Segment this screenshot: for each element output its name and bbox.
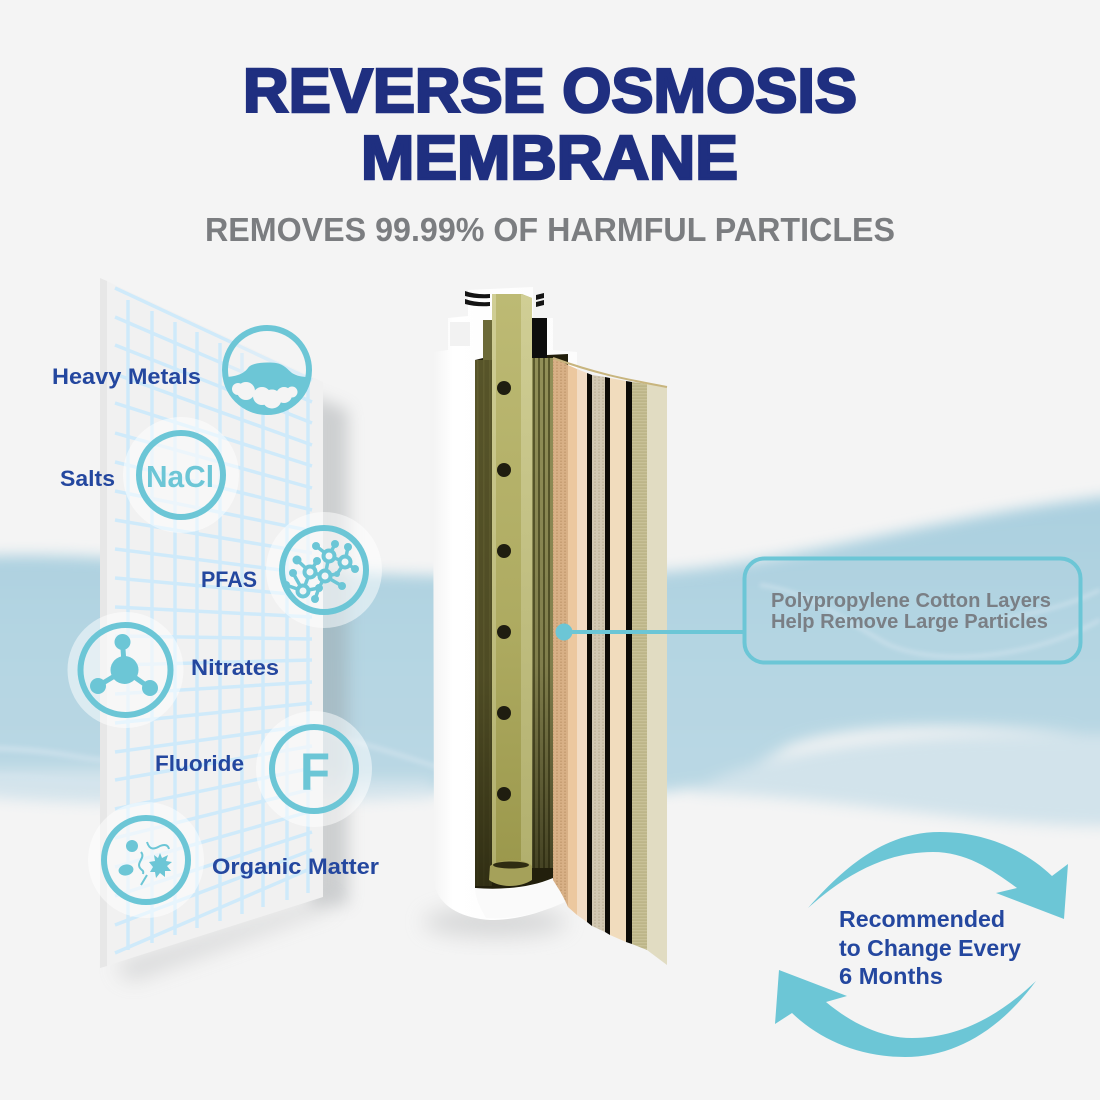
callout: polypropylene cotton layers bbox=[744, 558, 1080, 662]
reminder text: to Change Every bbox=[839, 935, 1021, 961]
item: salts bbox=[60, 417, 239, 533]
title: MEMBRANE bbox=[361, 124, 738, 193]
item: PFAS bbox=[201, 512, 382, 628]
icon: fluoride: F bbox=[300, 743, 330, 802]
arrow: bottom cycle bbox=[775, 970, 1036, 1057]
label: Salts bbox=[60, 466, 115, 491]
item: fluoride bbox=[155, 711, 372, 827]
black collar block bbox=[532, 318, 547, 358]
reminder text bbox=[839, 906, 1021, 989]
cutaway interior bbox=[475, 318, 568, 889]
background water wave band bbox=[0, 494, 1100, 826]
tube base bbox=[489, 860, 532, 886]
filter cartridge bbox=[423, 287, 577, 937]
cartridge white housing bbox=[433, 287, 577, 920]
left pleats bbox=[475, 360, 492, 886]
label: Heavy Metals bbox=[52, 364, 201, 389]
central tube bbox=[492, 294, 532, 866]
label: PFAS bbox=[201, 567, 257, 592]
reminder text: 6 Months bbox=[839, 963, 943, 989]
icon: heavy metals bbox=[225, 328, 309, 412]
icon: salts NaCl: NaCl bbox=[146, 459, 214, 494]
callout: polypropylene cotton layers: Polypropylene Cotton Layers bbox=[771, 590, 1051, 612]
callout leader line bbox=[556, 624, 744, 640]
icon: nitrates molecule bbox=[68, 612, 184, 728]
reminder text: Recommended bbox=[839, 906, 1005, 932]
item: nitrates bbox=[68, 612, 279, 728]
title: REVERSE OSMOSIS bbox=[243, 57, 857, 126]
icon: organic matter bbox=[88, 802, 204, 918]
panel: membrane sheet bbox=[100, 278, 348, 980]
item: heavy metals bbox=[52, 328, 309, 412]
label: Nitrates bbox=[191, 655, 279, 680]
title bbox=[243, 57, 857, 193]
subtitle: REMOVES 99.99% OF HARMFUL PARTICLES bbox=[205, 211, 895, 248]
icon: fluoride bbox=[256, 711, 372, 827]
bottom white rim bbox=[475, 878, 565, 918]
callout: polypropylene cotton layers: Help Remove Large Particles bbox=[771, 611, 1048, 633]
tube holes bbox=[497, 381, 511, 801]
item: organic matter bbox=[88, 802, 379, 918]
o-rings bbox=[465, 291, 544, 307]
icon: PFAS molecule bbox=[266, 512, 382, 628]
cartridge drop shadow bbox=[423, 907, 567, 937]
icon: salts NaCl bbox=[123, 417, 239, 533]
arrow: top cycle bbox=[808, 832, 1068, 919]
label: Organic Matter bbox=[212, 854, 379, 879]
filter layers bbox=[553, 358, 667, 965]
right pleats bbox=[532, 358, 553, 868]
replacement reminder bbox=[775, 832, 1068, 1057]
label: Fluoride bbox=[155, 751, 244, 776]
